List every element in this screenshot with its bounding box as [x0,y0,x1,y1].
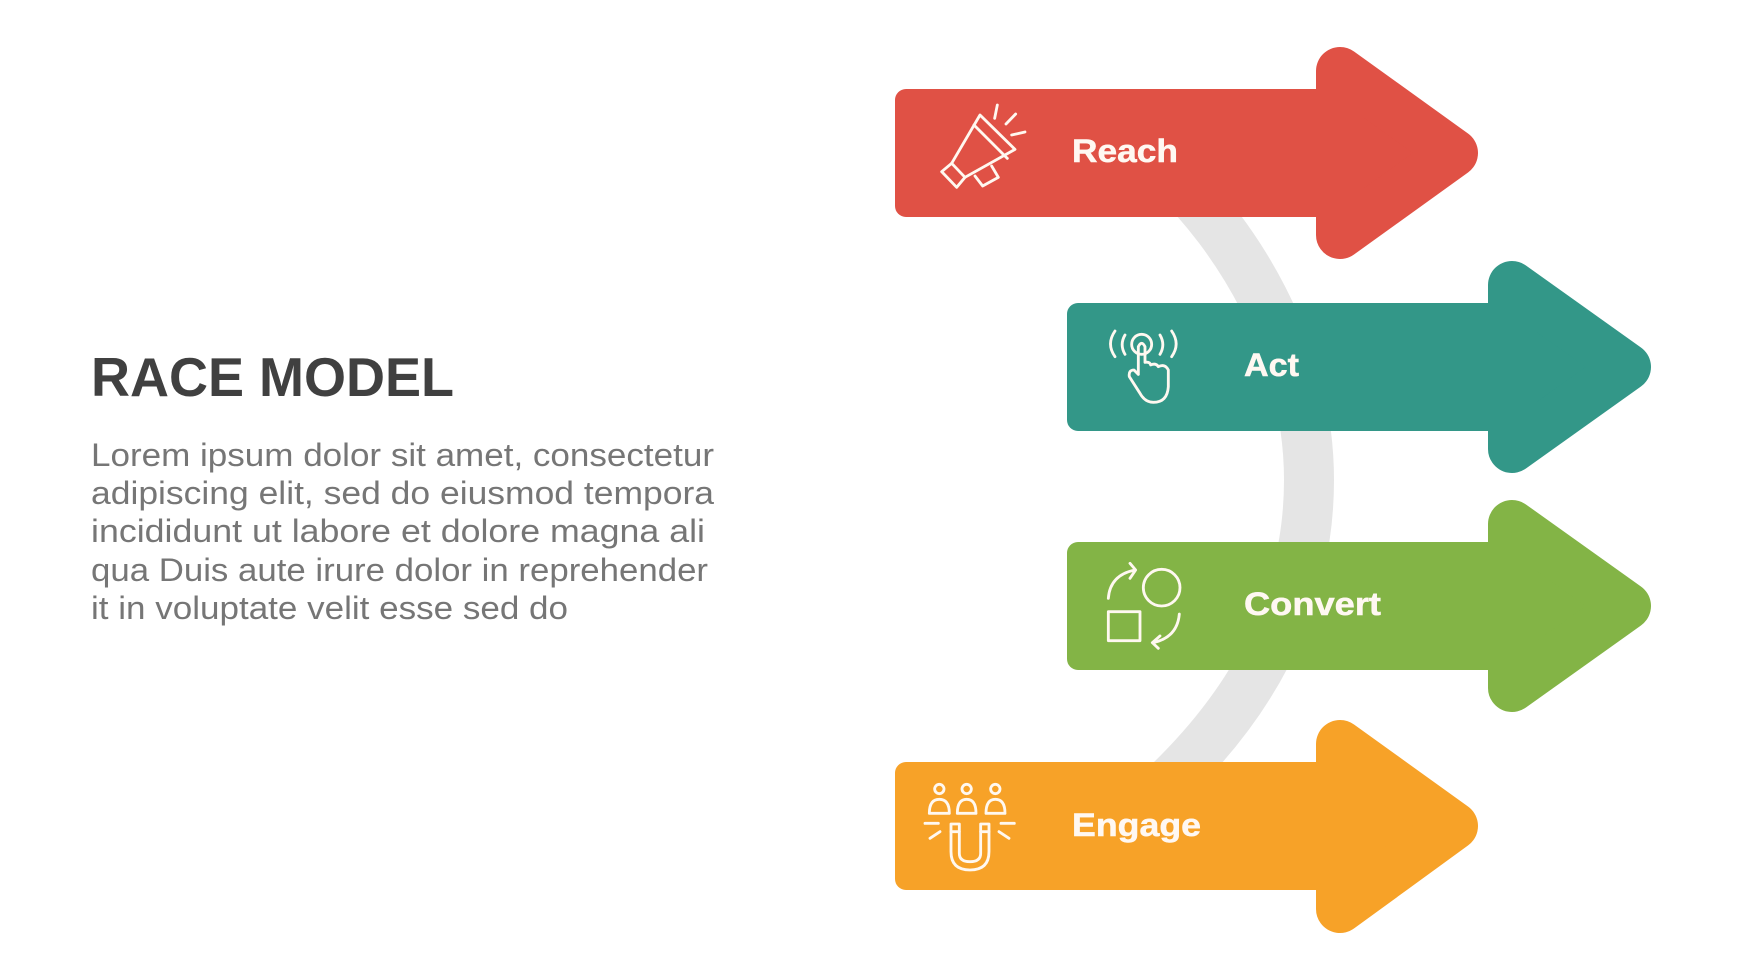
icon: shapes and cycle arrows [1108,563,1180,648]
label: Convert: Convert [1244,586,1381,622]
description text block: qua Duis aute irure dolor in reprehender [91,552,708,588]
title: RACE MODEL [91,346,454,408]
label: Engage: Engage [1072,807,1201,843]
description text block: Lorem ipsum dolor sit amet, consectetur [91,437,714,473]
description text block [91,437,714,626]
label: Reach: Reach [1072,133,1178,169]
description text block: adipiscing elit, sed do eiusmod tempora [91,475,714,511]
description text block: it in voluptate velit esse sed do [91,590,568,626]
icon: megaphone [942,105,1025,187]
description text block: incididunt ut labore et dolore magna ali [91,513,705,549]
arrow: Act [1067,285,1627,449]
icon: people and magnet [925,784,1014,870]
label: Act: Act [1244,347,1299,383]
icon: touch hand [1110,331,1176,402]
arrow: Convert [1067,524,1627,688]
arrow: Engage [895,744,1454,909]
curved connector arc [1150,175,1309,800]
arrow: Reach [895,71,1454,235]
